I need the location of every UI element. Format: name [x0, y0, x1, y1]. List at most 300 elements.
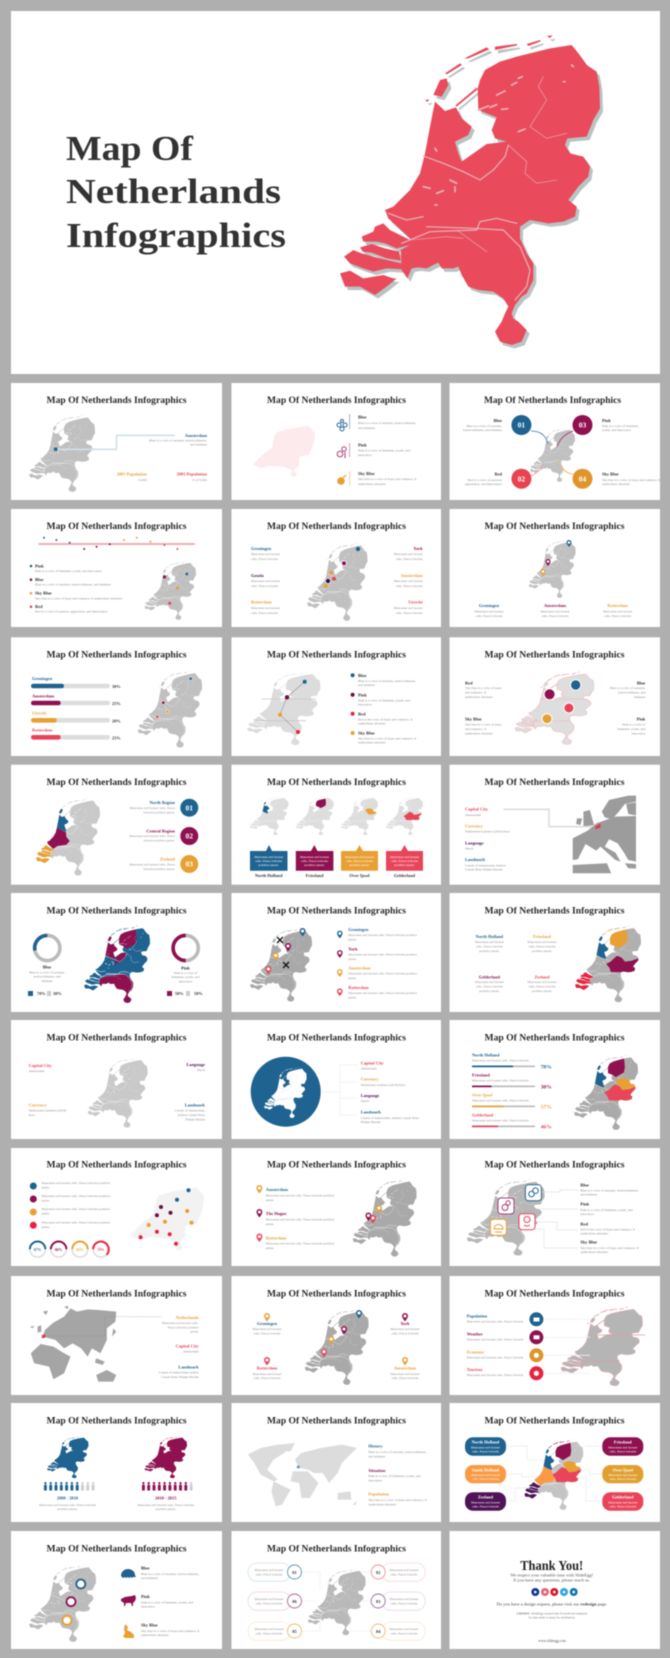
bar: Utrecht 20%: 20% [112, 718, 121, 723]
text: sky blue: Sky blue is a color of hope and romance. It [580, 1246, 639, 1250]
pill: Over Ijssel: odio. Fusce lobortis [609, 1477, 637, 1481]
text: Netherlands [162, 1315, 200, 1334]
legend: sky blue: Sky Blue [35, 591, 52, 596]
hero title: Netherlands [66, 172, 281, 211]
badge 02 [511, 469, 531, 489]
legend: pink: Pink is a color of feminine, youth, and innocence. [35, 569, 103, 574]
people icons: pink [142, 1482, 193, 1491]
hero map of the Netherlands [340, 34, 601, 346]
text: landmark [465, 857, 506, 872]
bar: Gelderland: 46% [541, 1124, 552, 1130]
panel: topics with outlined map [450, 1276, 660, 1395]
panel: four numbered colors [450, 383, 660, 500]
item 1: purus. [42, 1186, 50, 1190]
social icons [531, 1588, 578, 1596]
connectors [506, 1446, 602, 1501]
text: Amsterdam: Amsterdam [544, 603, 566, 608]
title: Map Of Netherlands Infographics [267, 1289, 406, 1299]
text: sky blue: symbolizes altruistic [141, 1633, 169, 1637]
bar: Gelderland: Gelderland [472, 1113, 494, 1118]
badge 02: 02 [186, 832, 193, 841]
text: situation: Situation [368, 1468, 386, 1473]
text: red: and romance. It [465, 690, 486, 694]
text: capital city: Capital City [361, 1060, 385, 1065]
icon: sky blue [337, 475, 346, 485]
text: North Holland: odio. Fusce lobortis [476, 944, 504, 948]
gauge 70% [93, 1242, 109, 1257]
pill: South Holland: Maecenas sed laoreet [471, 1473, 500, 1477]
text: pink: Pink is a color of feminine, [602, 424, 639, 429]
text: Rotterdam [251, 600, 280, 615]
callout 02: 02 [376, 1570, 380, 1575]
text: Gelderland [475, 974, 504, 993]
legend: blue: Blue [35, 577, 44, 582]
item: The Hague [256, 1209, 335, 1226]
text: population: Population [368, 1492, 389, 1497]
item: Groningen: Maecenas sed laoreet [252, 1327, 282, 1331]
callout 02: odio. Fusce lobortis [391, 1572, 418, 1576]
legend: Groningen: purus. [348, 938, 357, 942]
gauge 66% [51, 1242, 66, 1257]
text: red: symbolizes altruistic [465, 695, 493, 699]
text: Amsterdam: Maecenas sed laoreet [394, 579, 423, 583]
legend: York: purus. [348, 957, 357, 961]
legend: sky blue: Sky blue is a color of hope and romance. It [358, 736, 416, 740]
text: landmark [175, 1103, 206, 1122]
text: language [465, 840, 484, 850]
text: Groningen: Maecenas sed laoreet [251, 552, 280, 556]
bar: Gelderland: Maecenas sed laoreet odio. Fusce lobortis [472, 1119, 529, 1123]
panel: blue circle map [232, 1020, 441, 1139]
text: Gouda: Maecenas sed laoreet [251, 579, 280, 583]
map: Friesland [296, 798, 334, 836]
title: Map Of Netherlands Infographics [484, 1033, 625, 1043]
item: Groningen: Groningen [257, 1321, 278, 1326]
map [530, 429, 576, 482]
text: red: Red [580, 1221, 589, 1226]
population 2001: 2001 Population [117, 472, 148, 477]
two-color map [84, 925, 151, 1004]
pill: North Holland: Maecenas sed laoreet [471, 1445, 500, 1449]
text: red: symbolizes altruistic [580, 1232, 609, 1236]
population 2003: 17,273,000 [192, 478, 207, 483]
map [88, 1059, 148, 1128]
text: currency [465, 823, 510, 834]
text: Friesland: porttitor purus. [532, 949, 552, 953]
text: Friesland: odio. Fusce lobortis [529, 944, 556, 948]
item: Amsterdam: Amsterdam [266, 1187, 288, 1192]
title: Map Of Netherlands Infographics [46, 1289, 187, 1299]
legend: red: Red [35, 604, 43, 609]
text: Rotterdam: odio. Fusce lobortis [604, 614, 632, 618]
text: Netherlands: Fusce lobortis porttitor [168, 1326, 200, 1330]
pill: South Holland [465, 1465, 506, 1483]
map with markers [307, 543, 368, 621]
item: Tourism: Tourism [467, 1367, 483, 1372]
map [308, 1570, 366, 1636]
legend: red: Red is the color of hope and romance. It [358, 717, 413, 721]
item: Rotterdam: Rotterdam [266, 1235, 287, 1240]
map with pins [305, 1309, 369, 1385]
box: Gelderland: odio. Fusce lobortis [391, 859, 419, 863]
white map [264, 1066, 308, 1119]
text: landmark: Anfern Canals Peter [178, 1113, 206, 1117]
bar: Over Ijssel [472, 1093, 552, 1110]
text: blue: trustworthiness, and intimate [463, 428, 502, 433]
bar: Amsterdam 25%: 25% [112, 701, 121, 706]
text: North Region: lobortis porttitor purus. [143, 810, 175, 814]
box: Over Ijssel: porttitor purus. [349, 863, 370, 867]
pill: Friesland: odio. Fusce lobortis [609, 1449, 637, 1453]
text: pink: Pink [637, 717, 646, 722]
pill: Gelderland: odio. Fusce lobortis [609, 1504, 637, 1508]
text: Zeeland: lobortis porttitor purus. [143, 867, 175, 871]
title: Map Of Netherlands Infographics [46, 395, 187, 405]
callout 06: odio. Fusce lobortis [256, 1602, 283, 1606]
text: sky blue: Sky Blue [358, 471, 375, 476]
panel: six region pills [450, 1403, 660, 1522]
item: Rotterdam: purus. [266, 1246, 274, 1250]
icon: blue animal [121, 1569, 136, 1578]
text: York: Maecenas sed laoreet [394, 552, 423, 556]
box: Friesland: porttitor purus. [304, 863, 325, 867]
text: Friesland: Maecenas sed laoreet [528, 940, 557, 944]
text: Utrecht: odio. Fusce lobortis [396, 611, 423, 615]
bar: Rotterdam 25%: Rotterdam [32, 728, 53, 733]
title: Map Of Netherlands Infographics [267, 1543, 406, 1553]
bar: North Holland [472, 1053, 552, 1070]
panel: color meanings with pink grid map [232, 383, 441, 500]
text: York: odio. Fusce lobortis [396, 557, 423, 561]
callout 01: odio. Fusce lobortis [256, 1572, 283, 1576]
bar: Groningen 30% [31, 676, 121, 689]
text: pink [580, 1202, 633, 1216]
icon tile: pink [498, 1198, 514, 1214]
text: blue: Blue [43, 965, 51, 970]
box: North Holland: porttitor purus. [259, 863, 279, 867]
text: red: The blue is a color of hope [465, 686, 502, 690]
title: Map Of Netherlands Infographics [484, 1289, 625, 1299]
title: Map Of Netherlands Infographics [484, 905, 625, 915]
text: landmark: Pluijm Maxim [361, 1120, 381, 1124]
bar: Rotterdam 25%: 25% [112, 735, 121, 740]
text: red: aggression, and importance [465, 482, 502, 487]
legend: Rotterdam: Maecenas sed laoreet odio. Fusce lobortis porttitor [348, 991, 418, 995]
legend: pink: Pink [358, 692, 367, 697]
text: blue: Blue [580, 1182, 589, 1187]
item: Rotterdam [252, 1357, 282, 1380]
legend: blue: and intimate [358, 683, 375, 687]
item: Population: Maecenas sed laoreet odio. Fusce lobortis [467, 1320, 524, 1324]
icon: pink [337, 447, 346, 458]
panel: four provinces [232, 765, 441, 885]
item: Weather [467, 1330, 543, 1344]
item: The Hague: Maecenas sed laoreet odio. Fusce lobortis porttitor [266, 1218, 335, 1222]
title: Map Of Netherlands Infographics [484, 1160, 625, 1170]
legend: Rotterdam [337, 985, 418, 1000]
title: Map Of Netherlands Infographics [484, 1416, 625, 1426]
item 3: Maecenas sed laoreet odio. Fusce lobortis porttitor [42, 1207, 111, 1211]
legend: York [337, 946, 418, 961]
panel: numbered items and dot map [11, 1148, 222, 1266]
text: blue: Blue is a color of serenity, [29, 970, 65, 976]
box: Friesland: Maecenas sed laoreet [300, 855, 329, 859]
item 4: Maecenas sed laoreet odio. Fusce lobortis porttitor [42, 1220, 111, 1224]
legend: pink: Pink is a color of feminine, youth, and [358, 698, 410, 703]
hero map shadow [346, 38, 604, 349]
text: Zeeland [528, 974, 557, 993]
box: Over Ijssel: Over Ijssel [349, 873, 370, 878]
population 2003 [177, 472, 208, 483]
text: capital city [361, 1060, 385, 1070]
text: Zeeland [130, 857, 176, 871]
text: sky blue: and romance. It [465, 727, 486, 731]
people icons: blue [44, 1482, 95, 1491]
text: capital city: Amsterdam [465, 813, 481, 817]
text: sky blue: Sky Blue [602, 472, 619, 477]
legend: sky blue [351, 730, 416, 744]
text: capital city: Amsterdam [361, 1066, 377, 1070]
text: 2000 - 2010: Maecenas sed laoreet odio. Fusce lobortis [39, 1503, 97, 1507]
pill: Over Ijssel: Maecenas sed laoreet [608, 1473, 637, 1477]
text: capital city: Capital City [465, 807, 489, 812]
text: sky blue: Sky Blue [580, 1240, 597, 1245]
item: Economy [467, 1348, 543, 1362]
text: situation: innocence [368, 1478, 383, 1482]
text: Gelderland: odio. Fusce lobortis [476, 984, 504, 988]
callout 06 [248, 1592, 302, 1610]
text: pink: feminine, youth, and [171, 975, 200, 980]
pill: South Holland: odio. Fusce lobortis [472, 1477, 500, 1481]
title: Map Of Netherlands Infographics [46, 905, 187, 915]
panel: six cities [232, 509, 441, 627]
item: Amsterdam: Maecenas sed laoreet [390, 1372, 420, 1376]
text: pink [602, 418, 639, 433]
text: history: and intimate [368, 1454, 386, 1458]
credit [517, 1611, 588, 1619]
text: blue: Blue is a color of serenity, trustworthiness, [358, 421, 416, 426]
bar: North Holland: 78% [541, 1064, 552, 1070]
panel: circles on outlined map [450, 637, 660, 756]
text: landmark: Landmark [465, 857, 486, 862]
location dot [297, 1466, 300, 1468]
connectors [302, 1572, 371, 1631]
panel: Amsterdam population [11, 383, 222, 500]
text: Groningen: odio. Fusce lobortis [251, 557, 279, 561]
item: Amsterdam: purus. [266, 1198, 274, 1202]
bar: North Holland: Maecenas sed laoreet odio. Fusce lobortis [472, 1059, 529, 1063]
pill: Gelderland: Maecenas sed laoreet [608, 1500, 637, 1504]
connectors [527, 1190, 578, 1248]
text: language: Language [361, 1093, 379, 1098]
panel: three regions [11, 765, 222, 885]
text: history: Blue is a color of serenity, trustworthiness, [368, 1450, 427, 1455]
item 3 [30, 1207, 111, 1216]
pill: Zeeland [465, 1492, 506, 1511]
text: sky blue: Sky Blue [141, 1623, 158, 1628]
text: language: Language [465, 840, 484, 845]
text: pink [171, 965, 200, 984]
bar: Friesland: Friesland [472, 1073, 490, 1078]
legend: pink: 50% [194, 991, 203, 996]
location dot [54, 448, 57, 451]
text: North Region: Maecenas sed laoreet odio. Fusce [130, 806, 175, 810]
text: capital city: Amsterdam [183, 1350, 199, 1354]
map with rings [29, 1565, 96, 1642]
text: population: Sky blue is a color of hope and romance. It [368, 1498, 427, 1502]
box: Friesland: odio. Fusce lobortis [301, 859, 329, 863]
panel: six numbered callouts [232, 1531, 441, 1649]
legend: pink [351, 692, 410, 706]
text: Amsterdam [540, 603, 570, 618]
title: Map Of Netherlands Infographics [46, 777, 187, 787]
text: blue: and intimate [141, 1576, 158, 1580]
title: Map Of Netherlands Infographics [267, 395, 406, 405]
box: North Holland [250, 845, 288, 878]
text: 2010 - 2015: porttitor purus. [156, 1507, 176, 1511]
text: blue: Blue is a color of serenity, [466, 424, 502, 429]
text: red: Red is the color of hope and romance. It [580, 1228, 635, 1232]
panel: connected dots on map [232, 637, 441, 756]
map [28, 415, 96, 492]
text: blue: and intimate [358, 426, 375, 430]
callout 01: Maecenas sed laoreet [254, 1568, 284, 1572]
text: currency: Currency [29, 1103, 47, 1108]
box: North Holland: odio. Fusce lobortis [255, 859, 283, 863]
text: sky blue: symbolizes altruistic [358, 482, 386, 486]
item: York: York [400, 1321, 410, 1326]
callout 03: Maecenas sed laoreet [390, 1597, 419, 1601]
panel: province percentages [450, 1020, 660, 1139]
item: The Hague: The Hague [266, 1211, 286, 1216]
item: Amsterdam [390, 1357, 420, 1380]
item: Rotterdam [256, 1234, 335, 1250]
item: Rotterdam: Maecenas sed laoreet odio. Fusce lobortis porttitor [266, 1242, 335, 1246]
callout 06: Maecenas sed laoreet [254, 1597, 284, 1601]
legend: blue: 30% [53, 991, 62, 996]
text: pink: Pink is a color of feminine, youth, and [141, 1600, 193, 1606]
callout 05 [248, 1622, 302, 1640]
legend: red [30, 604, 108, 615]
legend: Groningen: Groningen [348, 927, 369, 932]
legend: sky blue: Sky Blue [358, 730, 375, 736]
gauge 61%: 61% [76, 1248, 84, 1252]
text: blue: Blue [358, 415, 367, 420]
legend: red: Red is a color of passion, aggression, and importance. [35, 610, 108, 615]
item: Weather: Weather [467, 1331, 483, 1336]
gauge 61% [72, 1242, 88, 1257]
text: Amsterdam: Amsterdam [400, 573, 423, 578]
pill: Friesland: Maecenas sed laoreet [608, 1445, 637, 1449]
panel: icons on map [450, 1148, 660, 1266]
item: Amsterdam [256, 1185, 335, 1202]
callout 04: 04 [376, 1629, 381, 1634]
badge 03 [180, 855, 198, 873]
text: capital city: Capital City [176, 1343, 199, 1348]
pill: South Holland: South Holland [472, 1467, 500, 1472]
text: North Region [130, 800, 176, 814]
text: pink: youth, and innocence [602, 428, 631, 433]
callout 01: 01 [292, 1570, 297, 1575]
item: Economy: Economy [467, 1349, 485, 1354]
text: North Holland: North Holland [476, 934, 504, 939]
map: Over Ijssel [341, 798, 378, 836]
outlined map [561, 1307, 645, 1386]
legend: sky blue: symbolizes altruistic [358, 740, 386, 744]
population 2003: 2003 Population [177, 472, 208, 477]
text: currency: Netherland Guilders (2019) [29, 1108, 66, 1112]
text: landmark: Canals Peter Pluijm Maxim [161, 1375, 199, 1379]
bar: Groningen 30%: 30% [112, 684, 121, 689]
text: currency: Currency [361, 1077, 379, 1082]
blue map [46, 1436, 90, 1479]
pill: Zeeland: odio. Fusce lobortis [472, 1504, 500, 1508]
item 1: Maecenas sed laoreet odio. Fusce lobortis porttitor [42, 1181, 111, 1185]
text: landmark [361, 1110, 420, 1124]
light dot map [131, 1187, 204, 1251]
legend: Rotterdam: Rotterdam [348, 985, 369, 990]
badge 01: 01 [186, 803, 193, 812]
bar: Amsterdam 25%: Amsterdam [32, 694, 55, 699]
text: Groningen [474, 603, 504, 618]
pill: Zeeland: Zeeland [478, 1494, 494, 1500]
divider lines [349, 414, 351, 486]
item: Groningen [252, 1313, 282, 1336]
text: 2010 - 2015: 2010 - 2015 [155, 1496, 177, 1501]
text: landmark: Landmark [361, 1110, 382, 1115]
text: capital city [176, 1343, 199, 1354]
title: Map Of Netherlands Infographics [46, 1160, 187, 1170]
text: language [186, 1062, 205, 1072]
bar: Amsterdam 25% [31, 694, 121, 706]
gauge 70%: 70% [97, 1248, 105, 1252]
box: Friesland [296, 845, 333, 878]
population 2001 [117, 472, 148, 483]
title: Map Of Netherlands Infographics [484, 649, 625, 659]
panel: three pins [450, 509, 660, 627]
legend: blue: Blue is a color of serenity, trustworthiness, [358, 679, 416, 684]
pill: Zeeland: Maecenas sed laoreet [471, 1500, 500, 1504]
legend: red: Red [358, 711, 366, 716]
map with pins [250, 928, 312, 1002]
box: Gelderland: Maecenas sed laoreet [390, 855, 419, 859]
text: Central Region: Central Region [146, 828, 176, 833]
text: blue [463, 418, 502, 433]
text: Gouda: Gouda [251, 573, 264, 578]
text: capital city [29, 1063, 52, 1073]
text: landmark: Canals of Amsterdam Anfern [159, 1370, 199, 1374]
map: North Holland [250, 798, 289, 836]
curved connectors [531, 431, 573, 476]
callout 03: 03 [376, 1599, 381, 1604]
item: Economy: Maecenas sed laoreet odio. Fusce lobortis [467, 1355, 524, 1359]
callout 06: 06 [292, 1599, 298, 1604]
text: sky blue [358, 471, 416, 486]
map with dots [144, 561, 196, 620]
legend: pink: 50% [175, 991, 184, 996]
text: North Holland [475, 934, 504, 953]
callout 02 [371, 1563, 425, 1581]
legend: pink [30, 564, 103, 574]
text: language: Dutch [465, 846, 474, 850]
legend: Amsterdam: Amsterdam [348, 966, 371, 971]
callout 05: odio. Fusce lobortis [256, 1632, 283, 1636]
text: pink: Pink is a color of feminine, youth, and [358, 448, 410, 454]
text: Gelderland: Gelderland [479, 974, 501, 979]
icon: blue [337, 420, 347, 431]
icon tile: red [519, 1214, 535, 1230]
bar: Gelderland [472, 1113, 552, 1130]
